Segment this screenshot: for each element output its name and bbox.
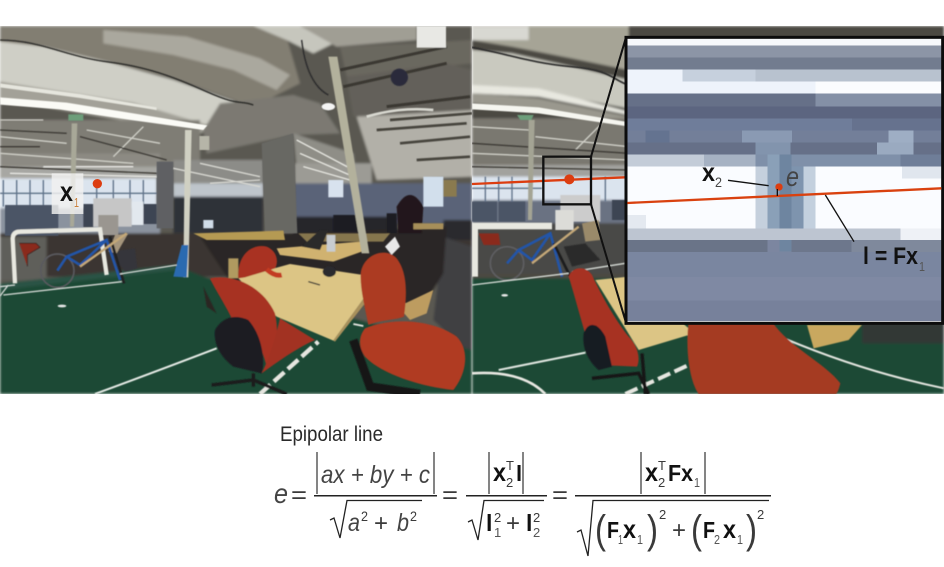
fraction: x2T F x1 over root sum of squares: 2 [714,532,720,547]
pixelated inset imagery [627,39,941,323]
fraction: x2T F x1 over root sum of squares: ( [691,508,703,552]
fraction: x2T F x1 over root sum of squares: 1 [618,532,623,547]
label: x2: x [702,157,715,187]
fraction: x2T F x1 over root sum of squares: x [623,516,636,544]
fraction: x2T F x1 over root sum of squares [575,452,771,556]
fraction: x2T l over root l1 l2: 2 [533,525,540,540]
fraction: ax+by+c over root a2+b2: + [374,510,388,537]
fraction: x2T l over root l1 l2: 1 [494,525,501,540]
fraction: x2T F x1 over root sum of squares: ( [595,508,607,552]
leader: l = Fx1 [825,195,854,242]
inset frame [626,37,943,323]
fraction: x2T F x1 over root sum of squares: + [672,517,686,544]
label: e: e [786,161,799,192]
fraction: x2T F x1 over root sum of squares: ) [746,508,757,552]
fraction: x2T F x1 over root sum of squares: x [723,516,736,544]
label: x1: x [60,176,73,207]
fraction: x2T l over root l1 l2: l [526,510,532,536]
photo: right camera view of office [472,26,944,394]
fraction: x2T l over root l1 l2: 2 [533,510,540,525]
fraction: x2T l over root l1 l2: x [493,459,506,487]
inset locator box [543,157,591,204]
panel: magnified inset [626,37,943,323]
fraction: x2T F x1 over root sum of squares: 1 [737,532,743,547]
windows and ceiling detail left [0,47,472,207]
formula term: e equals: = [291,482,307,509]
formula: epipolar distance [274,452,771,556]
point: x2 marker [775,183,783,191]
fraction: x2T F x1 over root sum of squares: T [658,458,666,473]
perpendicular distance tick [775,189,779,196]
fraction: x2T F x1 over root sum of squares: F [607,517,619,543]
heading: epipolar line: Epipolar line [280,423,383,446]
fraction: ax+by+c over root a2+b2: 2 [410,508,417,524]
fraction: x2T F x1 over root sum of squares: 2 [658,475,665,490]
label: l = Fx1: l = Fx [863,243,919,270]
fraction: x2T l over root l1 l2: l [516,461,522,486]
label: x1: 1 [74,195,79,210]
point: epipolar marker [564,174,574,184]
equals: = [442,482,458,509]
label: l = Fx1: 1 [919,259,925,274]
fraction: x2T F x1 over root sum of squares: 2 [659,507,666,522]
fraction: ax+by+c over root a2+b2: b [397,509,409,537]
fraction: x2T l over root l1 l2 [466,452,547,540]
epipolar line across right photo [472,177,625,184]
fraction: ax+by+c over root a2+b2: ax + by + c [321,461,430,489]
label: x1 background [52,173,83,214]
fraction: x2T F x1 over root sum of squares: x [645,459,658,487]
fraction: ax+by+c over root a2+b2 [314,452,437,538]
fraction: x2T l over root l1 l2: l [486,510,492,536]
fraction: x2T F x1 over root sum of squares: 1 [637,532,643,547]
label: x2 [702,157,722,190]
fraction: x2T F x1 over root sum of squares: ) [647,508,658,552]
leader: x2 [728,180,769,186]
fraction: x2T F x1 over root sum of squares: F [703,517,715,543]
fraction: x2T F x1 over root sum of squares: 1 [694,475,700,490]
fraction: x2T F x1 over root sum of squares: 2 [757,507,764,522]
fraction: ax+by+c over root a2+b2: a [348,509,360,537]
point: x1 marker [93,179,102,188]
label: x2: 2 [715,174,722,190]
epipolar line in inset [627,188,941,203]
fraction: x2T l over root l1 l2: T [506,458,514,473]
fraction: x2T l over root l1 l2: 2 [506,475,513,490]
formula term: e equals: e [274,478,288,509]
fraction: ax+by+c over root a2+b2: 2 [361,508,368,524]
fraction: x2T F x1 over root sum of squares: Fx [668,460,693,486]
connector lines to inset [591,37,626,323]
equals: = [552,482,568,509]
fraction: x2T l over root l1 l2: 2 [494,510,501,525]
fraction: x2T l over root l1 l2: + [506,510,520,537]
photo: left camera view of office [0,26,472,394]
formula term: e equals [274,478,307,509]
